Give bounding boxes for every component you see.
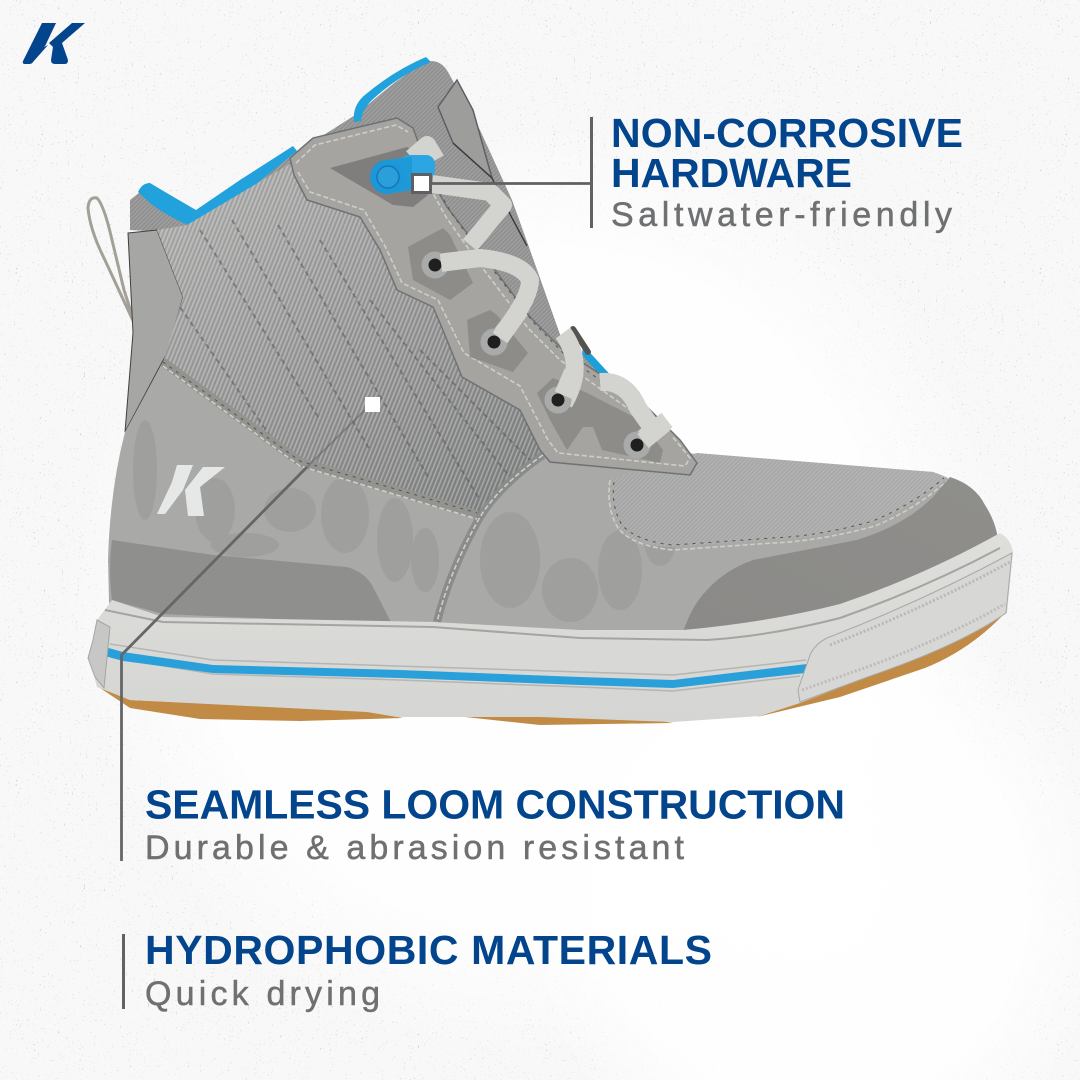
eyelet plates (408, 228, 663, 463)
top lace loop behind hook (412, 145, 436, 160)
midsole (88, 533, 1013, 722)
callout: non-corrosive hardware (590, 110, 963, 234)
callout: hydrophobic materials (122, 927, 712, 1013)
blue gusset behind laces (582, 345, 682, 447)
ankle seam (437, 455, 543, 622)
top hook plate (330, 147, 428, 207)
callout: non-corrosive hardware: NON-CORROSIVE (611, 110, 963, 156)
metal eyelets (425, 255, 647, 455)
logo: K mark (23, 23, 85, 64)
toe cap (683, 477, 998, 632)
quarter top seam (163, 362, 477, 519)
boot illustration (88, 57, 1013, 725)
side quarter with camo (108, 358, 948, 630)
toe rubber bumper (798, 553, 1012, 702)
callout: seamless loom construction: Durable & abrasion resistant (145, 829, 685, 867)
heel counter band (110, 540, 392, 624)
leader marker: hardware (412, 174, 430, 192)
callout: hydrophobic materials: HYDROPHOBIC MATERIALS (145, 927, 712, 973)
leader line: loom construction (122, 410, 365, 861)
toe mesh vamp (608, 453, 950, 550)
heel strap (125, 230, 183, 432)
heel tab (88, 620, 110, 688)
leader marker: mesh (365, 397, 380, 412)
blue lace hook (370, 155, 435, 194)
lace ends over eyelets (441, 259, 665, 441)
mesh side panel (157, 162, 545, 515)
gum outsole (97, 613, 1005, 725)
callout: seamless loom construction: SEAMLESS LOOM CONSTRUCTION (145, 782, 845, 828)
K logo on heel (157, 465, 225, 516)
blue collar lining (138, 57, 431, 226)
laces (432, 184, 667, 443)
pull loop (88, 198, 136, 327)
zipper pull (573, 329, 588, 352)
callout: hydrophobic materials: Quick drying (145, 975, 380, 1013)
leader line: hardware (430, 182, 591, 185)
lace eyestay (290, 118, 697, 475)
tongue and rear collar (130, 61, 640, 470)
blue midsole stripe (105, 647, 807, 688)
callout: seamless loom construction (145, 782, 845, 867)
callout: non-corrosive hardware: Saltwater-friendly (611, 196, 952, 234)
callout: non-corrosive hardware: HARDWARE (611, 150, 852, 196)
